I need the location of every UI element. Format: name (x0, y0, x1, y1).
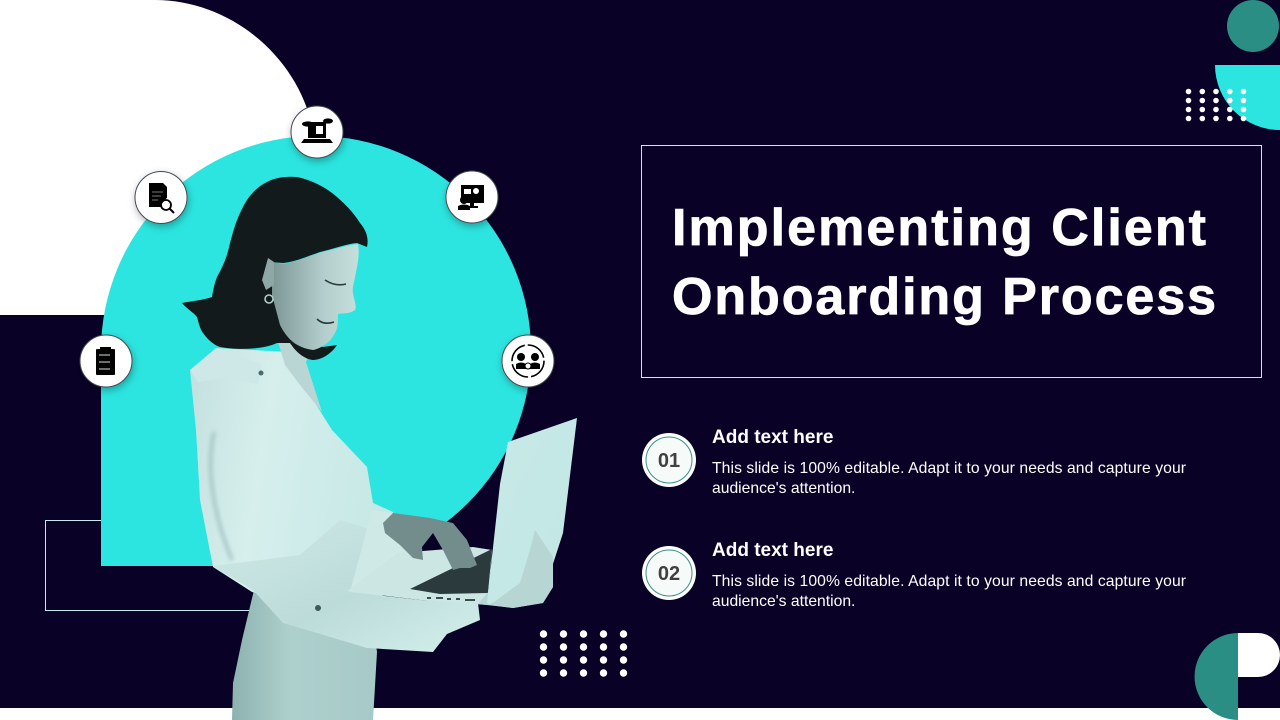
icon: team cycle (502, 335, 554, 387)
shirt torso and upper arm (190, 348, 400, 610)
face (272, 244, 359, 350)
forearm sleeve (213, 520, 480, 652)
collar button (258, 370, 264, 376)
laptop base (347, 547, 492, 605)
laptop screen (487, 418, 577, 605)
dot grid top right (1186, 89, 1246, 121)
bottom right white rounded tab (1238, 633, 1280, 677)
number badge 02: 02 (658, 563, 680, 585)
title: Implementing Client (672, 199, 1206, 257)
neck and collar opening (276, 335, 322, 412)
cuff button (315, 605, 321, 611)
heading 01: Add text here (712, 427, 833, 448)
number badge 02 (642, 546, 696, 600)
number badge 01: 01 (658, 450, 680, 472)
sleeve fold shadow (211, 432, 232, 560)
white rounded shape top left (0, 0, 316, 315)
icon: video meeting screen (446, 171, 498, 223)
icon badges around arch (80, 106, 554, 387)
body text 01: This slide is 100% editable. Adapt it to your needs and capture your (712, 460, 1186, 477)
cyan arch shape (101, 136, 531, 566)
hair (182, 177, 368, 360)
illustration: woman holding laptop (182, 177, 577, 720)
body text 01: audience's attention. (712, 480, 855, 497)
icon: laptop with chat (291, 106, 343, 158)
dot grid bottom centre (540, 630, 627, 677)
item 02 (642, 540, 1186, 610)
bottom right teal half circle (1195, 633, 1238, 720)
title box (642, 146, 1262, 378)
top right teal circle (1227, 0, 1279, 52)
ear and earring (262, 258, 274, 303)
white bottom strip (0, 708, 1280, 720)
typing hand (383, 513, 477, 570)
keyboard (410, 549, 492, 594)
skirt (232, 590, 377, 720)
number badge 01 (642, 433, 696, 487)
outlined frame behind arch (46, 520, 346, 610)
supporting palm (478, 570, 553, 608)
icon: checklist clipboard (80, 335, 132, 387)
supporting fingers (490, 530, 553, 608)
heading 02: Add text here (712, 540, 833, 561)
collar (190, 348, 262, 384)
eye and smile (317, 280, 346, 323)
top right cyan quarter circle (1215, 65, 1280, 130)
laptop ports (427, 597, 475, 601)
body text 02: This slide is 100% editable. Adapt it to your needs and capture your (712, 573, 1186, 590)
body text 02: audience's attention. (712, 593, 855, 610)
title: Onboarding Process (672, 268, 1216, 326)
icon: document search (135, 172, 187, 224)
item 01 (642, 427, 1186, 497)
shirt cuff under hand (350, 510, 412, 592)
